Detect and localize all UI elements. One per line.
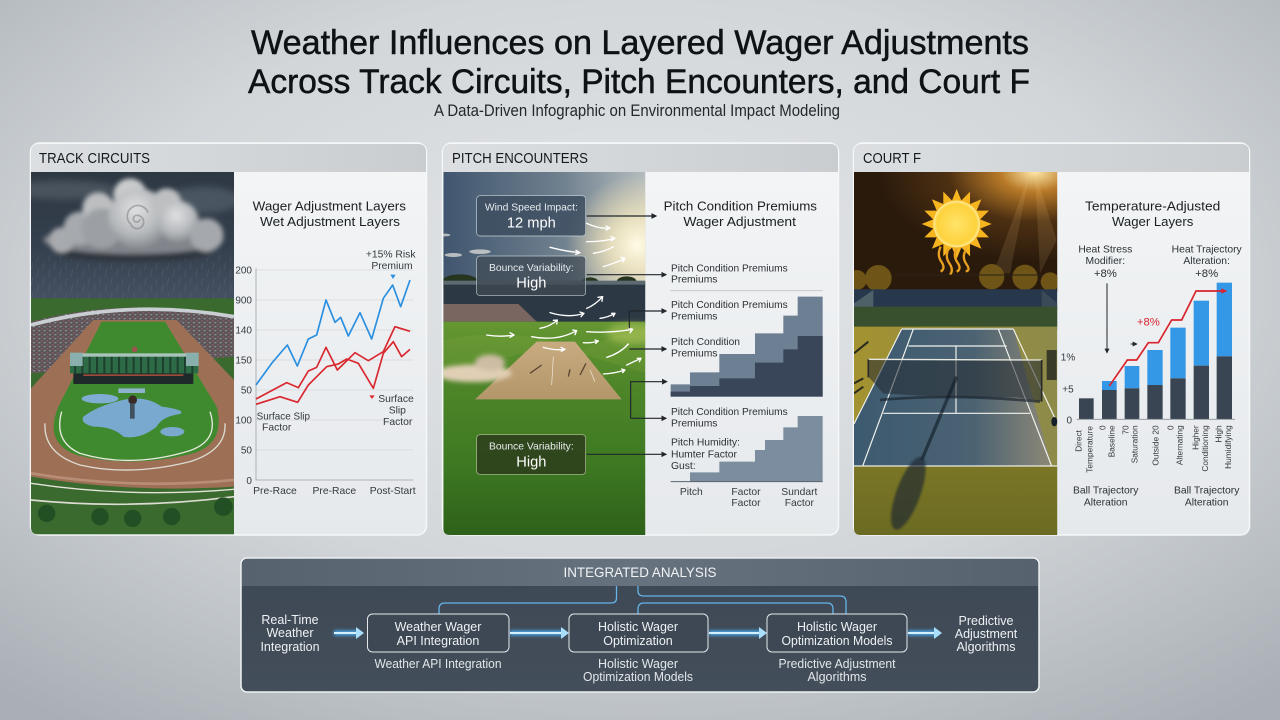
chart title: Wager Adjustment Layers (253, 199, 406, 214)
panel body (241, 558, 1039, 692)
upper steps light (671, 297, 823, 397)
caption: holistic models (583, 657, 693, 684)
rotated bar labels: 0 (1097, 425, 1107, 430)
caption: weather api: Weather API Integration (374, 657, 502, 671)
axis labels: 1% (1061, 353, 1075, 364)
input label: Weather (266, 626, 314, 640)
panel: court f (847, 143, 1250, 537)
axis labels: 0 (1067, 415, 1073, 426)
flow arrow 3 (709, 627, 767, 639)
rotated bar labels: Temperature (1084, 426, 1094, 473)
panel: integrated analysis (241, 558, 1039, 692)
annotation: surface slip left: Surface Slip (257, 411, 310, 422)
callout: heat trajectory: +8% (1195, 268, 1218, 280)
callout: bounce variability: Bounce Variability: (489, 263, 574, 274)
annotation: surface slip right (369, 394, 414, 428)
illustration: sunlit tennis court (847, 172, 1061, 537)
x axis labels: Sundart (781, 487, 818, 498)
panel card (442, 143, 838, 535)
callout: wind speed: Wind Speed Impact: (485, 202, 578, 213)
chart title: Temperature-Adjusted (1085, 199, 1220, 214)
panel header (854, 144, 1249, 172)
annotation: surface slip right: Slip (389, 406, 406, 417)
x axis labels: Pre-Race (313, 486, 356, 497)
callout: wind speed: 12 mph (507, 216, 556, 232)
x axis labels: Factor (785, 498, 815, 509)
x axis labels: Factor (731, 487, 761, 498)
x axis labels (253, 486, 416, 497)
axis labels: 900 (235, 295, 252, 306)
step labels: Premiums (671, 418, 717, 429)
label: +8%: +8% (1137, 316, 1160, 328)
annotation: risk premium (366, 250, 416, 279)
rotated bar labels: Alternating (1175, 425, 1185, 465)
rotated bar labels: Direct (1073, 429, 1083, 452)
panel header: TRACK CIRCUITS (39, 151, 150, 167)
flow arrow 2 (510, 627, 569, 639)
bottom labels (1073, 486, 1240, 508)
bottom labels: Ball Trajectory (1174, 486, 1240, 497)
step labels: Pitch Condition (671, 337, 740, 348)
caption: predictive algorithms (778, 657, 896, 684)
rotated bar labels: High (1214, 425, 1224, 442)
sun (922, 189, 992, 275)
step labels: Pitch Condition Premiums (671, 300, 788, 311)
rotated bar labels: Saturation (1129, 425, 1139, 463)
output label: Algorithms (956, 640, 1016, 654)
bottom labels: Alteration (1185, 497, 1229, 508)
red series lower (256, 342, 410, 404)
step labels: Pitch Humidity: (671, 437, 740, 448)
line chart: wager adjustment layers (235, 199, 416, 497)
panel: pitch encounters (435, 143, 838, 535)
callout: heat trajectory: Heat Trajectory (1172, 244, 1243, 255)
annotation: surface slip left: Factor (262, 423, 292, 434)
callout: bounce variability lower (477, 435, 586, 474)
callout: bounce variability (477, 256, 586, 296)
step labels: Premiums (671, 275, 717, 286)
annotation: risk premium: Premium (371, 261, 413, 272)
rotated bar labels: Higher (1190, 425, 1200, 450)
caption: predictive algorithms: Predictive Adjustment (778, 657, 896, 671)
callout: bounce variability lower: Bounce Variability: (489, 441, 574, 452)
input label: Real-Time (261, 613, 319, 627)
output label: Predictive (959, 614, 1013, 628)
title (248, 24, 1030, 101)
upper steps dark (671, 336, 823, 397)
panel: track circuits (10, 143, 426, 538)
axis labels: 0 (246, 476, 252, 487)
step chart: pitch condition premiums (664, 199, 823, 509)
connector arrows (587, 216, 667, 454)
step labels: Gust: (671, 461, 696, 472)
chart title (253, 199, 406, 229)
step box: weather api (368, 614, 509, 652)
annotation: surface slip right: Factor (383, 417, 413, 428)
step labels: Pitch Condition Premiums (671, 407, 788, 418)
callout: heat stress modifier: Modifier: (1086, 256, 1125, 267)
callout: heat stress modifier (1078, 244, 1132, 280)
panel header (242, 559, 1038, 586)
caption: holistic models: Optimization Models (583, 670, 693, 684)
subtitle: A Data-Driven Infographic on Environmental Impact Modeling (434, 102, 840, 120)
step box: optimization models: Holistic Wager (797, 620, 877, 634)
axis labels: 150 (235, 355, 252, 366)
output label (955, 614, 1018, 654)
bottom labels: Alteration (1084, 497, 1128, 508)
x axis labels (680, 487, 818, 509)
arrow: heat stress (1105, 283, 1108, 353)
connectors from header (439, 586, 846, 614)
annotation: risk premium: +15% Risk (366, 250, 416, 261)
annotation: surface slip left (257, 411, 310, 434)
caption: holistic models: Holistic Wager (598, 657, 678, 671)
axis labels: 50 (241, 445, 252, 456)
flow arrow 4 (908, 627, 942, 639)
callout: heat trajectory (1172, 244, 1243, 280)
red series upper (256, 327, 410, 399)
step box: weather api: API Integration (397, 634, 479, 648)
output label: Adjustment (955, 627, 1018, 641)
chart title (664, 199, 817, 229)
chart title: Wager Layers (1112, 214, 1193, 229)
axis labels (1061, 353, 1075, 426)
step labels: Pitch Condition Premiums (671, 263, 788, 274)
panel header (443, 144, 838, 172)
step box: holistic optimization (569, 614, 708, 652)
step box: optimization models: Optimization Models (782, 634, 892, 648)
blue series (256, 280, 410, 385)
panel header: COURT F (863, 151, 921, 167)
chart title: Wager Adjustment (683, 214, 796, 229)
title: Weather Influences on Layered Wager Adjustments (251, 24, 1029, 62)
callout: bounce variability: High (516, 276, 546, 292)
axis labels: 50 (241, 385, 252, 396)
x axis labels: Factor (731, 498, 761, 509)
wind arrows (487, 223, 641, 374)
callout: heat stress modifier: Heat Stress (1078, 244, 1132, 255)
chart title: Pitch Condition Premiums (664, 199, 817, 214)
chart title (1085, 199, 1220, 229)
bottom labels: Ball Trajectory (1073, 486, 1139, 497)
x axis labels: Pre-Race (253, 486, 297, 497)
x axis labels: Pitch (680, 487, 703, 498)
bar chart: temperature-adjusted wager layers (1061, 199, 1243, 508)
step box: holistic optimization: Optimization (603, 634, 673, 648)
rotated bar labels: Humidifying (1223, 425, 1233, 469)
axis labels: +5 (1062, 384, 1074, 395)
title: Across Track Circuits, Pitch Encounters, and Court F (248, 63, 1030, 101)
red trend line (1109, 288, 1227, 386)
axis labels: 140 (235, 325, 252, 336)
step labels (671, 263, 788, 472)
axis labels (235, 265, 252, 487)
callout: heat trajectory: Alteration: (1183, 256, 1230, 267)
rotated bar labels (1073, 425, 1233, 473)
callout: heat stress modifier: +8% (1094, 268, 1117, 280)
rotated bar labels: Outside 20 (1150, 425, 1160, 466)
step box: weather api: Weather Wager (395, 620, 481, 634)
panel card (854, 143, 1250, 535)
step box: holistic optimization: Holistic Wager (598, 620, 678, 634)
panel header (31, 144, 426, 172)
step labels: Humter Factor (671, 449, 738, 460)
illustration: cricket pitch in wind (443, 172, 646, 535)
step box: optimization models (767, 614, 907, 652)
callout: wind speed (477, 196, 586, 236)
input label: Integration (260, 640, 320, 654)
axis labels: 200 (235, 265, 252, 276)
step labels: Premiums (671, 312, 717, 323)
callout: bounce variability lower: High (516, 455, 546, 471)
axis labels: 100 (235, 415, 252, 426)
illustration: storm over race track (31, 172, 234, 534)
lower steps (690, 416, 823, 482)
panel card (30, 143, 426, 535)
input label (260, 613, 320, 654)
step labels: Premiums (671, 349, 717, 360)
panel header: PITCH ENCOUNTERS (452, 151, 588, 167)
chart title: Wet Adjustment Layers (260, 214, 400, 229)
caption: predictive algorithms: Algorithms (807, 670, 867, 684)
rotated bar labels: 70 (1120, 425, 1130, 435)
rotated bar labels: Baseline (1107, 425, 1117, 457)
flow arrow 1 (334, 627, 364, 639)
panel header: INTEGRATED ANALYSIS (564, 564, 716, 580)
stacked bars (1079, 283, 1232, 419)
rotated bar labels: Conditioning (1200, 425, 1210, 472)
annotation: surface slip right: Surface (378, 394, 414, 405)
rotated bar labels: 0 (1165, 425, 1175, 430)
x axis labels: Post-Start (370, 486, 416, 497)
